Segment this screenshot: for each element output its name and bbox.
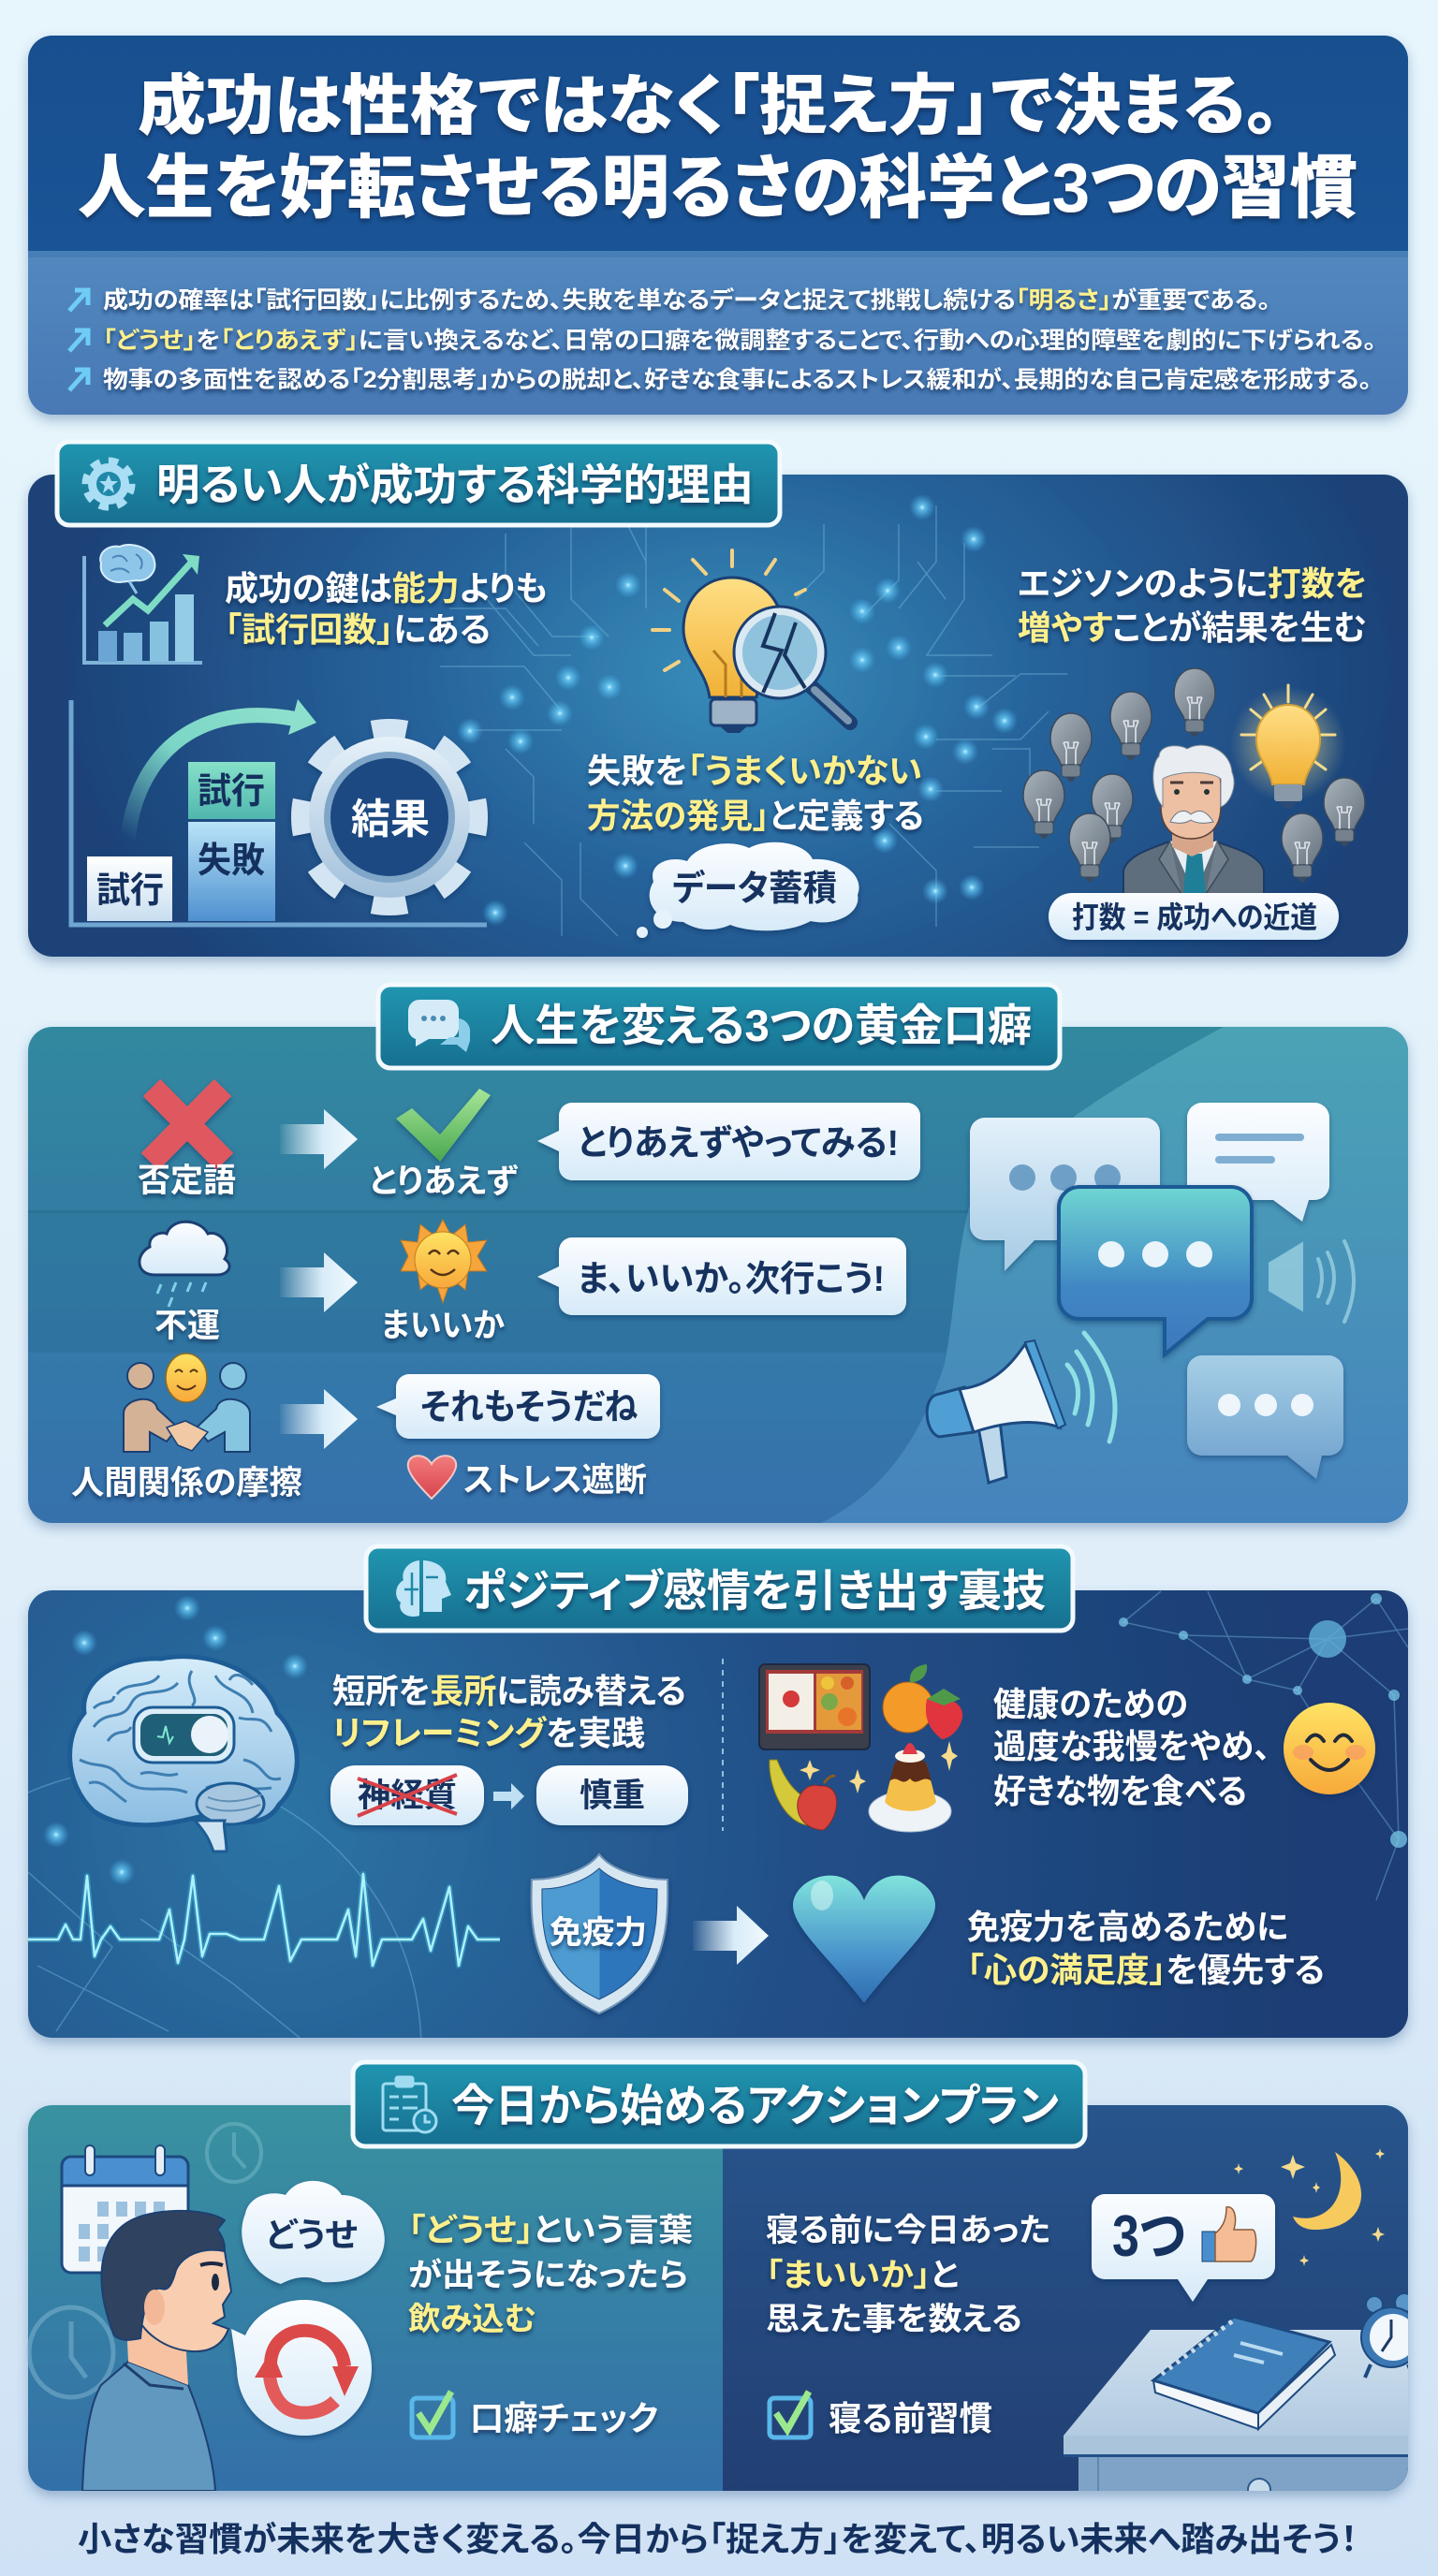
heading: positive emotion: ポジティブ感情を引き出す裏技 [463,1566,1046,1616]
icon: megaphone [927,1333,1115,1483]
labels [154,1308,505,1344]
row: negative word to toriaezu [138,1088,920,1200]
banana and apple [770,1760,837,1830]
callout: batting count pill [1049,893,1339,940]
icon: gear star [86,461,131,506]
callout: swallow arrows bubble [231,2300,372,2436]
labels [138,1163,519,1200]
icon: notebook [1153,2317,1335,2429]
icon: unlit bulbs [1023,668,1365,882]
desk [1064,2330,1408,2501]
icon: clipboard clock [383,2077,436,2132]
labels: 不運 [154,1308,220,1344]
bento box [759,1664,870,1749]
text: Edison: エジソンのように打数を [1018,564,1367,603]
callout: batting count pill: 打数 = 成功への近道 [1072,900,1317,934]
speech bubble: それもそうだね [420,1388,638,1427]
bubble: dots left [970,1118,1160,1271]
text: swallow dousei: 「どうせ」 という言葉 [408,2213,693,2248]
callout: dousei bubble [242,2181,385,2289]
row: bad luck to maiika [139,1220,906,1344]
text: failure definition [587,752,924,835]
icon: brain growth chart [84,545,202,663]
row: friction to stress block [71,1354,660,1501]
text: count maiika: 「まいいか」 と [766,2258,959,2293]
speech bubble [537,1237,906,1315]
speech bubble [376,1374,660,1439]
heading: golden phrases [378,985,1060,1068]
chart: heartbeat line [28,1874,500,1966]
heading: scientific reasons: 明るい人が成功する科学的理由 [156,461,754,509]
text: swallow dousei: が出そうになったら [408,2257,688,2293]
orange and strawberry [883,1664,962,1739]
text: Edison: 増やすことが結果を生む [1018,608,1367,647]
labels: 否定語 [138,1163,236,1199]
arc arrow [128,699,316,839]
icon: handshake people [124,1354,250,1452]
title: 人生を好転させる明るさの科学と3つの習慣 [78,149,1357,227]
icon: result gear [302,730,477,904]
summary bullets [69,286,1376,393]
checklist: bedtime habit: 寝る前習慣 [829,2399,992,2437]
text: failure definition: 失敗を「うまくいかない [587,752,922,790]
pill: neurotic struck through: 神経質 [358,1778,457,1814]
labels: まいいか [381,1308,505,1344]
clock top [207,2124,261,2182]
icon: smiling sun [401,1220,487,1303]
illustration: clocks and calendar [29,2124,261,2397]
panel: positive emotion tricks [0,1546,1408,2331]
text: reframing: 短所を長所に読み替える [332,1672,686,1710]
text: eat what you like: 好きな物を食べる [993,1772,1247,1810]
icon: heart and stress block [408,1456,647,1499]
icon: lit bulb [1230,685,1346,809]
icon: red X [150,1088,225,1162]
icon: green check [396,1089,491,1162]
callout: data accumulation cloud [637,842,859,938]
bubble: lines top right [1187,1103,1329,1222]
icon: smiley [1284,1703,1375,1794]
speech bubble: ま、いいか。次行こう! [578,1260,885,1299]
speech bubble: とりあえずやってみる! [578,1124,899,1164]
text: heart satisfaction: 「心の満足度」を優先する [967,1951,1325,1989]
heading: scientific reasons [57,442,780,525]
arrow [280,1109,358,1169]
heading: golden phrases: 人生を変える3つの黄金口癖 [491,1001,1032,1050]
text: eat what you like: 過度な我慢をやめ、 [993,1727,1270,1765]
panel: scientific reasons [28,442,1408,957]
checklist: bedtime habit [770,2392,992,2437]
text: swallow dousei: 飲み込む [408,2302,536,2337]
text: count maiika: 思えた事を数える [766,2302,1022,2337]
network pattern [0,1591,1408,2331]
text: key to success: 成功の鍵は能力よりも [225,569,548,607]
pudding [869,1743,951,1832]
text: swallow dousei [408,2213,693,2337]
arrow [493,1783,524,1809]
icon: result gear: 結果 [351,797,430,842]
bubble: main [1059,1187,1252,1354]
chart: trial and failure stack [71,699,487,925]
label: 人間関係の摩擦 [71,1465,302,1501]
icon: blue heart [793,1876,935,2003]
bullet arrows [69,290,88,390]
text: key to success: 「試行回数」にある [225,610,491,649]
icon: light bulb and magnifier [653,550,850,733]
text: failure definition: 方法の発見」と定義する [587,797,924,835]
panel: action plan [28,2062,1421,2501]
sparkles [800,1741,958,1793]
callout: three thumbs up: 3つ [1112,2204,1185,2269]
bar: first trial [87,856,172,921]
icon: rain cloud [139,1222,229,1307]
icon: Edison portrait [1123,745,1264,894]
text: count maiika [766,2213,1050,2337]
title: 成功は性格ではなく「捉え方」で決まる。 [138,69,1280,142]
header panel [28,36,1408,415]
text: Edison [1018,564,1367,647]
summary text: 物事の多面性を認める「2分割思考」からの脱却と、好きな食事によるストレス緩和が、長期的な自己肯定感を形成する。 [103,366,1372,393]
text: eat what you like: 健康のための [993,1685,1188,1723]
text: eat what you like [993,1685,1270,1810]
footer message: 小さな習慣が未来を大きく変える。今日から「捉え方」を変えて、明るい未来へ踏み出そう！ [78,2520,1357,2558]
icon: speaker [1270,1241,1354,1322]
pill: careful [536,1765,688,1825]
text: key to success [225,569,548,649]
clock lower [29,2307,113,2397]
arrow [280,1389,358,1449]
arrow [280,1252,358,1312]
icon: alarm clock [1361,2293,1421,2378]
text: reframing [332,1672,686,1752]
summary text [103,286,1376,393]
divider [722,1659,724,1831]
icon: moon and stars [1234,2148,1385,2266]
panel: three golden phrases [28,985,1408,1523]
calendar [62,2145,188,2273]
bar: trial [188,762,275,819]
labels: とりあえず [369,1164,519,1200]
bar: trial: 試行 [198,772,265,812]
text: reframing: リフレーミングを実践 [332,1714,645,1752]
callout: dousei bubble: どうせ [266,2216,358,2254]
icon: brain head [396,1560,451,1617]
heading: action plan [353,2062,1085,2146]
icon: chat bubbles [408,1000,470,1052]
speech bubble [537,1103,920,1180]
icon: thumb [1202,2207,1256,2261]
icon: favourite foods [759,1664,962,1832]
illustration: speech bubbles and megaphone [927,1103,1354,1483]
bar: failure [188,822,275,921]
title [78,69,1357,227]
summary text: 成功の確率は「試行回数」に比例するため、失敗を単なるデータと捉えて挑戦し続ける 「明るさ」 が重要である。 [103,286,1270,314]
icon: immunity shield [532,1854,668,2013]
text: count maiika: 寝る前に今日あった [766,2213,1050,2248]
bar: failure: 失敗 [198,842,265,881]
summary text: 「どうせ」 を「とりあえず」 に言い換えるなど、日常の口癖を微調整することで、行動への心理的障壁を劇的に下げられる。 [103,328,1376,354]
arrow [693,1906,769,1965]
heading: positive emotion [366,1546,1073,1631]
pill: careful: 慎重 [580,1778,645,1814]
icon: immunity shield: 免疫力 [550,1915,647,1951]
text: heart satisfaction [967,1908,1325,1989]
bubble: dots bottom right [1187,1355,1343,1479]
text: heart satisfaction: 免疫力を高めるために [967,1908,1288,1946]
checklist: phrase check [412,2392,658,2437]
illustration: man speaking [82,2211,231,2491]
icon: brain with switch [70,1657,297,1852]
callout: three thumbs up [1092,2194,1275,2302]
bar: first trial: 試行 [96,871,164,911]
checklist: phrase check: 口癖チェック [470,2399,658,2437]
callout: data accumulation cloud: データ蓄積 [672,869,837,909]
icon: heart and stress block: ストレス遮断 [463,1462,647,1499]
heading: action plan: 今日から始めるアクションプラン [451,2081,1059,2130]
pill: neurotic struck through [330,1765,484,1825]
